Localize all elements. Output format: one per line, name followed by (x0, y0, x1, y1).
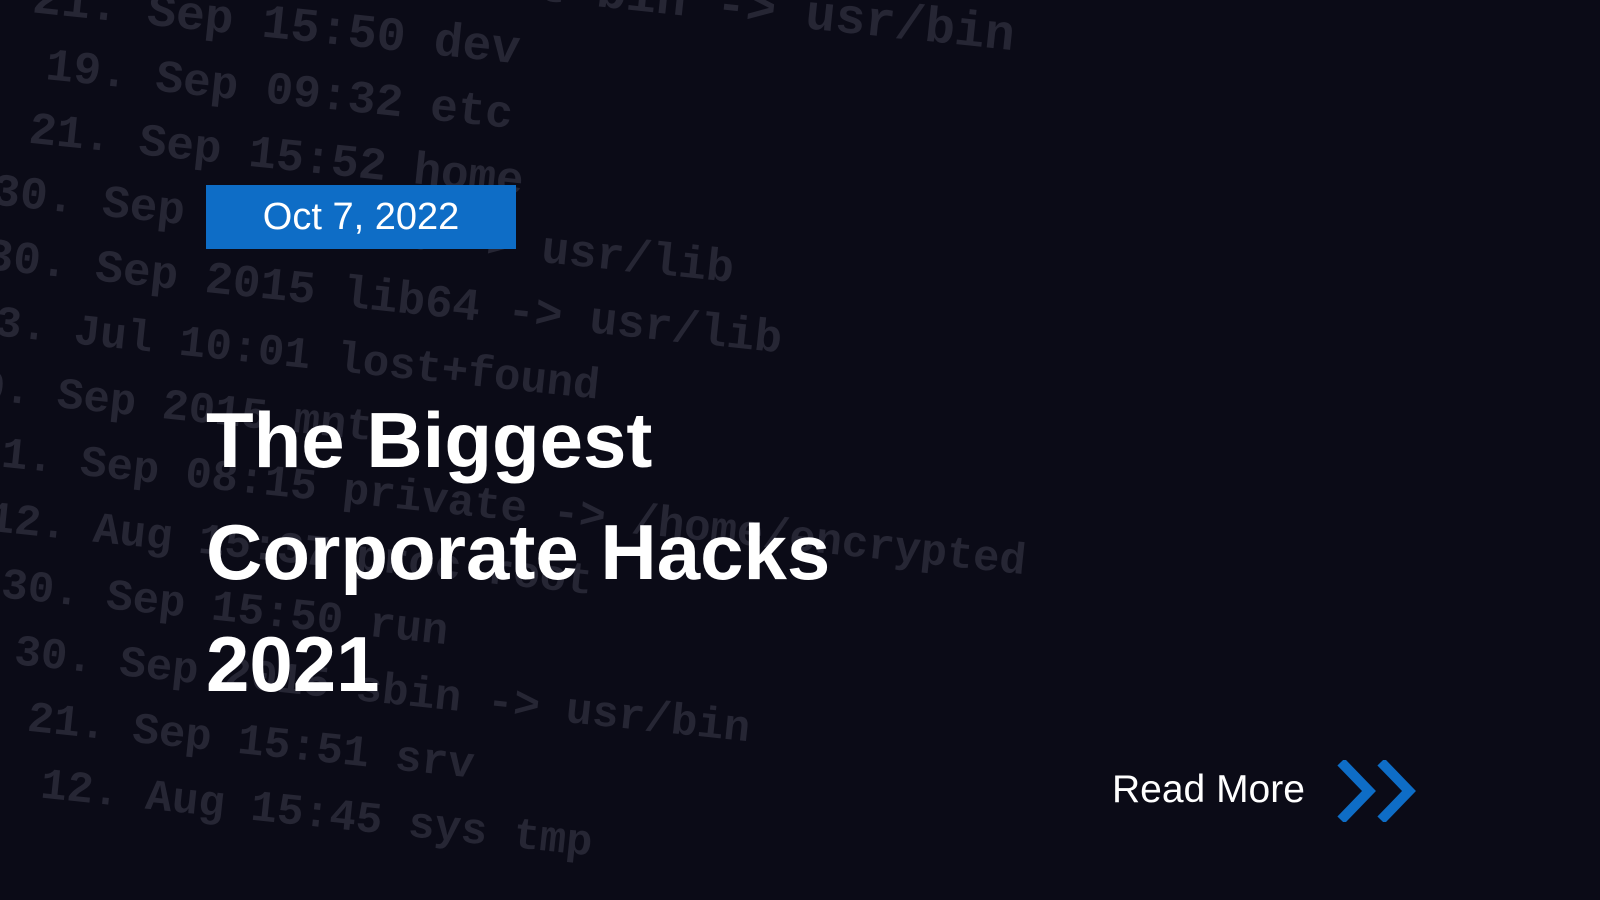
background: terminal code texture: 21. Sep 15:52 home (26, 105, 526, 208)
background: terminal code texture: 19. Sep 09:32 etc (43, 41, 515, 142)
date badge: Oct 7, 2022 (263, 196, 459, 238)
title: The Biggest (206, 396, 652, 484)
background: terminal code texture: 12. Aug 15:45 sys tmp (38, 762, 595, 869)
background: terminal code texture: 21. Sep 15:51 srv (25, 695, 477, 792)
read more link with chevrons (1112, 760, 1416, 822)
icon: double chevron (1338, 760, 1416, 822)
title (206, 396, 830, 708)
background: terminal code texture: 30. Sep 2015 lib64 -> usr/lib (0, 231, 785, 366)
background: terminal code texture: 30. Sep 2015 sbin -> usr/bin (12, 628, 752, 755)
read more link with chevrons: Read More (1112, 768, 1305, 811)
date badge (206, 185, 516, 249)
background: terminal code texture: 30. Sep 2015 lib -> usr/lib (0, 166, 736, 296)
title: 2021 (206, 620, 380, 708)
background: terminal code texture: 30. Sep 15:50 run (0, 561, 450, 658)
background: terminal code texture: 12. Aug 15:37 proc root (0, 495, 595, 608)
background: terminal code texture: 21. Sep 08:15 private -> /home/encrypted (0, 428, 1028, 588)
title: Corporate Hacks (206, 508, 830, 596)
